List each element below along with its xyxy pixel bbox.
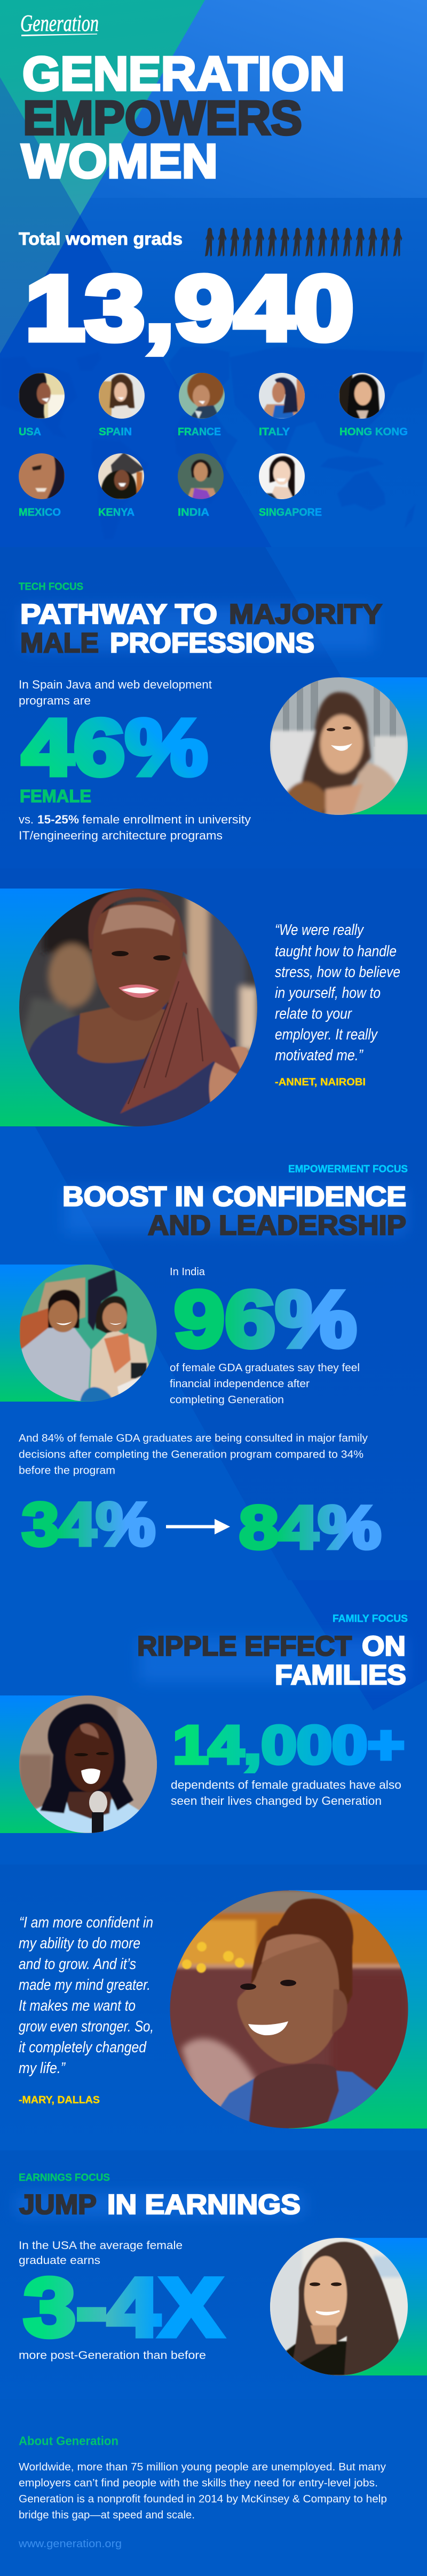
portrait: Italy [259,373,305,419]
gradient panel: spain [339,677,427,814]
big number: 34%: 34% [22,1491,155,1558]
background: about band [0,2399,427,2576]
heading: boost in confidence and leadership: AND LEADERSHIP [148,1210,406,1241]
background: left dark triangle [0,77,80,354]
heading glow: ripple [139,1637,406,1683]
background: tech focus band [0,547,427,868]
background: family band [0,1580,427,1865]
quote: annet: employer. It really [275,1026,378,1043]
heading: jump in earnings: IN EARNINGS [107,2189,301,2220]
text: about paragraph: Worldwide, more than 75 million young people are unemployed. But many [19,2461,386,2473]
label: tech focus: TECH FOCUS [19,581,83,593]
photo: mary [170,1890,408,2129]
big number: 96%: 96% [174,1274,357,1364]
country labels: SPAIN [99,426,132,438]
text: about paragraph: employers can’t find people with the skills they need for entry-level jobs. [19,2477,378,2489]
text: about paragraph: bridge this gap—at speed and scale. [19,2509,195,2521]
heading: jump in earnings [19,2189,301,2220]
background: empowerment band [0,1143,427,1580]
text: spain intro: In Spain Java and web development [19,678,212,691]
country labels: SINGAPORE [259,507,322,518]
portrait: Hong Kong [339,373,385,419]
text: family decisions: before the program [19,1465,115,1476]
attribution: mary: -MARY, DALLAS [19,2095,100,2106]
heading: boost in confidence and leadership: BOOST IN CONFIDENCE [62,1181,406,1212]
text: spain intro: programs are [19,694,91,707]
background: dark wedge [0,215,317,625]
heading: pathway to majority male professions: MALE [20,628,99,659]
quote: mary: “I am more confident in [19,1914,153,1931]
quote: mary: my life.” [19,2060,66,2077]
link: website: www.generation.org [18,2538,122,2550]
heading: jump in earnings: JUMP [19,2189,97,2220]
text: spain intro [19,678,212,707]
country labels [19,426,408,518]
background: tech focus corner [265,547,427,677]
portrait: India [178,453,224,499]
text: enrollment comparison: 15-25% [37,813,79,826]
quote: mary: and to grow. And it’s [19,1956,136,1973]
country labels: MEXICO [19,507,61,518]
quote: mary: made my mind greater. [19,1977,151,1994]
text: dependents: seen their lives changed by Generation [171,1794,382,1807]
portrait: Spain [99,373,145,419]
heading: ripple effect on families: ON [362,1631,406,1662]
attribution: annet: -ANNET, NAIROBI [275,1077,366,1088]
heading: ripple effect on families: FAMILIES [275,1660,406,1691]
background: mary quote band [0,1865,427,2150]
title: GENERATION [22,47,345,101]
country labels: KENYA [98,507,135,518]
label: earnings focus: EARNINGS FOCUS [19,2172,110,2183]
quote: annet: motivated me.” [275,1047,363,1064]
quote: mary: it completely changed [19,2039,147,2056]
label: empowerment focus: EMPOWERMENT FOCUS [288,1164,408,1175]
gradient panel: usa [339,2238,427,2375]
heading: boost in confidence and leadership [62,1181,406,1241]
text: about paragraph: Generation is a nonprofit founded in 2014 by McKinsey & Company to help [19,2493,387,2505]
quote: annet: “We were really [275,922,364,939]
text: family decisions: And 84% of female GDA graduates are being consulted in major family [19,1433,368,1444]
text: financial independence [170,1362,360,1406]
portrait: Singapore [259,453,305,499]
text: enrollment comparison: IT/engineering architecture programs [19,829,223,842]
big number: 13,940: 13,940 [25,257,354,359]
quote: mary [19,1914,154,2077]
big number: 3-4X: 3-4X [23,2261,223,2354]
big number: 14,000+: 14,000+ [173,1715,405,1775]
country labels: INDIA [178,507,209,518]
country labels: FRANCE [178,426,221,438]
portrait: USA [19,373,67,421]
big number: 46%: 46% [22,702,208,792]
text: family decisions: decisions after completing the Generation program compared to 34% [19,1449,363,1460]
photo: indian graduates [20,1265,157,1402]
heading: about generation: About Generation [19,2434,118,2448]
big number: 84%: 84% [239,1494,381,1562]
icon row: 16 women silhouettes [205,228,402,257]
quote: mary: It makes me want to [19,1997,136,2014]
gradient panel: family [0,1695,88,1833]
portrait: Mexico [19,453,65,499]
country labels: ITALY [259,426,290,438]
heading glow: tech [21,605,374,651]
logo: Generation: Generation [20,10,99,36]
heading glow: earnings [16,2193,304,2217]
label: female: FEMALE [20,786,91,806]
label: family focus: FAMILY FOCUS [333,1613,408,1625]
text: enrollment comparison: vs. [19,813,34,826]
heading: ripple effect on families [137,1631,406,1691]
background: header band [0,0,427,198]
gradient panel: annet [0,889,138,1126]
photo: spanish graduate [270,677,408,816]
text: usa intro: In the USA the average female [19,2239,183,2252]
gradient panel: mary [289,1890,427,2129]
quote: mary: grow even stronger. So, [19,2018,154,2035]
country labels: HONG KONG [339,426,408,438]
text: about paragraph [19,2461,387,2521]
quote: mary: my ability to do more [19,1935,140,1952]
background: totals band [0,198,427,547]
heading: pathway to majority male professions: PROFESSIONS [110,628,314,659]
text: dependents: dependents of female graduates have also [171,1778,401,1791]
title: EMPOWERS [23,92,302,145]
text: financial independence: financial independence after [170,1378,310,1390]
text: financial independence: completing Generation [170,1394,284,1406]
quote: annet [275,922,400,1064]
title [21,47,345,188]
text: dependents [171,1778,401,1807]
quote: annet: relate to your [275,1005,352,1022]
photo: usa graduate [270,2238,411,2375]
text: usa intro: graduate earns [19,2254,100,2267]
world map [0,347,425,540]
label: total women grads: Total women grads [19,229,183,249]
background: earnings band [0,2150,427,2399]
portrait: France [179,371,225,419]
text: in india: In India [170,1266,205,1278]
text: family decisions [19,1433,368,1476]
gradient panel: india [0,1265,88,1402]
photo: family speaker [19,1695,160,1835]
heading: pathway to majority male professions: MAJORITY [229,599,382,630]
quote: annet: stress, how to believe [275,964,400,981]
heading: ripple effect on families: RIPPLE EFFECT [137,1631,352,1662]
background: quote band [0,868,427,1143]
background: family corner [291,1580,427,1710]
quote: annet: taught how to handle [275,943,397,960]
photo: annet [19,889,257,1126]
text: more post-generation: more post-Generation than before [19,2349,206,2362]
portrait: Kenya [98,452,145,499]
text: enrollment comparison: female enrollment in university [82,813,251,826]
text: financial independence: of female GDA graduates say they feel [170,1362,360,1374]
heading: pathway to majority male professions: PATHWAY TO [20,599,217,630]
background: empowerment wedge [0,1127,288,1580]
quote: annet: in yourself, how to [275,985,381,1002]
title: WOMEN [21,135,218,188]
country labels: USA [19,426,41,438]
text: usa intro [19,2239,183,2267]
arrow [166,1519,230,1534]
background: teal triangle [0,0,205,215]
heading: pathway to majority male professions [20,599,382,659]
heading glow: boost [64,1188,406,1234]
text: enrollment comparison [19,813,251,842]
